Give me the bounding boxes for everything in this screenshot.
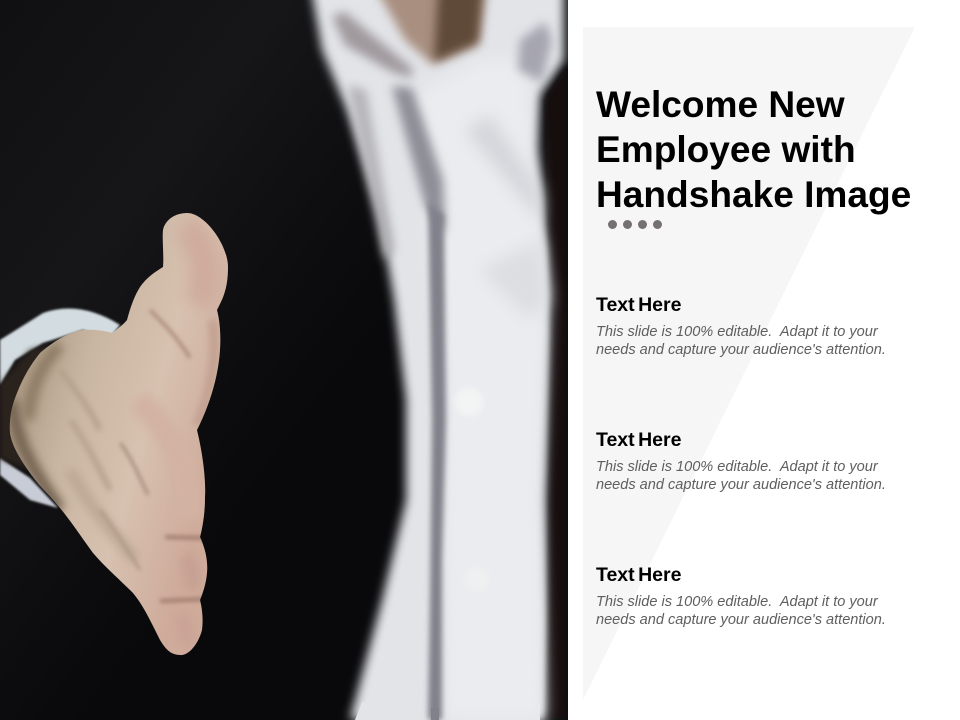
suit jacket background — [0, 0, 568, 720]
title — [596, 83, 911, 215]
body 1: needs and capture your audience's attention. — [596, 342, 886, 358]
text block 2 — [596, 429, 886, 493]
hand — [10, 213, 228, 655]
text block 3 — [596, 564, 886, 628]
body 3: needs and capture your audience's attention. — [596, 612, 886, 628]
shirt edge fill at frame — [355, 702, 540, 720]
body 2 — [596, 459, 886, 493]
title: Welcome New — [596, 83, 845, 125]
wrist shadow — [0, 345, 50, 470]
body 3: This slide is 100% editable. Adapt it to your — [596, 594, 878, 610]
background triangle — [583, 27, 914, 699]
dark right jacket edge — [546, 65, 568, 720]
shirt — [306, 0, 564, 720]
text block 1 — [596, 294, 886, 358]
cuff — [0, 309, 120, 508]
hand shading — [12, 225, 214, 645]
body 1 — [596, 324, 886, 358]
neck skin — [360, 0, 490, 64]
body 3 — [596, 594, 886, 628]
title: Handshake Image — [596, 173, 911, 215]
heading 3: Text Here — [596, 564, 681, 586]
shirt buttons — [455, 388, 483, 416]
dots decoration — [608, 220, 662, 229]
body 2: needs and capture your audience's attention. — [596, 477, 886, 493]
body 2: This slide is 100% editable. Adapt it to your — [596, 459, 878, 475]
heading 1: Text Here — [596, 294, 681, 316]
heading 2: Text Here — [596, 429, 681, 451]
title: Employee with — [596, 128, 856, 170]
placket edge fill at frame — [431, 708, 439, 720]
shirt button placket — [428, 200, 446, 720]
bright right shirt panel — [414, 60, 548, 720]
body 1: This slide is 100% editable. Adapt it to your — [596, 324, 878, 340]
photo: businessman offering handshake — [0, 0, 568, 720]
collar shadows — [332, 12, 552, 320]
